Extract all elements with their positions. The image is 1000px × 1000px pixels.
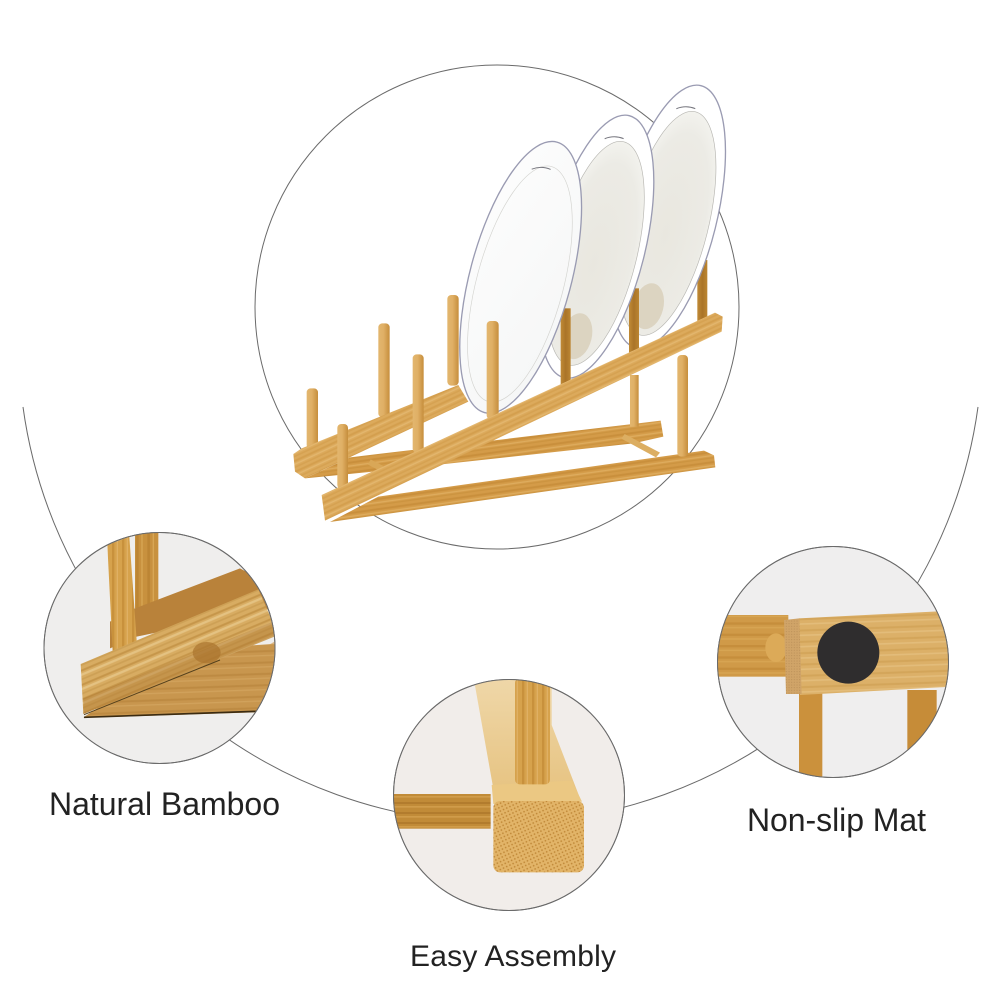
top face [492,785,582,804]
base wedge [83,643,280,717]
cross bar [393,794,491,829]
long rail [474,680,581,800]
dowel [515,678,550,784]
back rail [110,568,280,648]
back slanted rail and pegs [293,295,468,478]
front base rail [330,451,715,522]
rubber mat [817,622,879,684]
knob [766,634,785,661]
panel: natural bamboo detail [44,530,280,764]
peg in front of front plate [487,321,499,419]
front peg [107,537,137,652]
panel: easy assembly detail [393,678,624,910]
lower pegs and cross bars [368,375,660,471]
connecting arc [23,407,978,823]
back peg [135,530,158,608]
pale rear block [270,642,274,644]
front pegs [337,354,688,489]
slant shadow line [84,660,220,715]
panel: non-slip mat detail [713,546,953,780]
rear peg behind middle plate [629,288,639,353]
label: non-slip mat: Non-slip Mat [747,802,926,838]
contact shadow [84,711,256,717]
label: easy assembly: Easy Assembly [410,940,616,973]
front slanted rail [322,313,723,521]
darker lower half of bar [83,620,278,714]
panel: main plate rack circle [255,65,748,549]
plate: back [589,74,748,359]
plate: middle [517,104,676,389]
bamboo node [193,642,221,663]
legs [799,690,937,780]
rear rail [713,615,788,677]
maker's mark [605,134,624,143]
end face [784,618,802,694]
end grain face [493,801,584,872]
rear peg behind third plate [697,260,707,322]
maker's mark [532,164,551,174]
maker's mark [676,104,695,113]
lower rack: back base rail [305,421,663,478]
plate: front [435,129,606,426]
label: natural bamboo: Natural Bamboo [49,786,280,822]
front rail [799,611,953,695]
slanted bar [81,589,278,714]
peg in front of middle plate [561,308,571,386]
